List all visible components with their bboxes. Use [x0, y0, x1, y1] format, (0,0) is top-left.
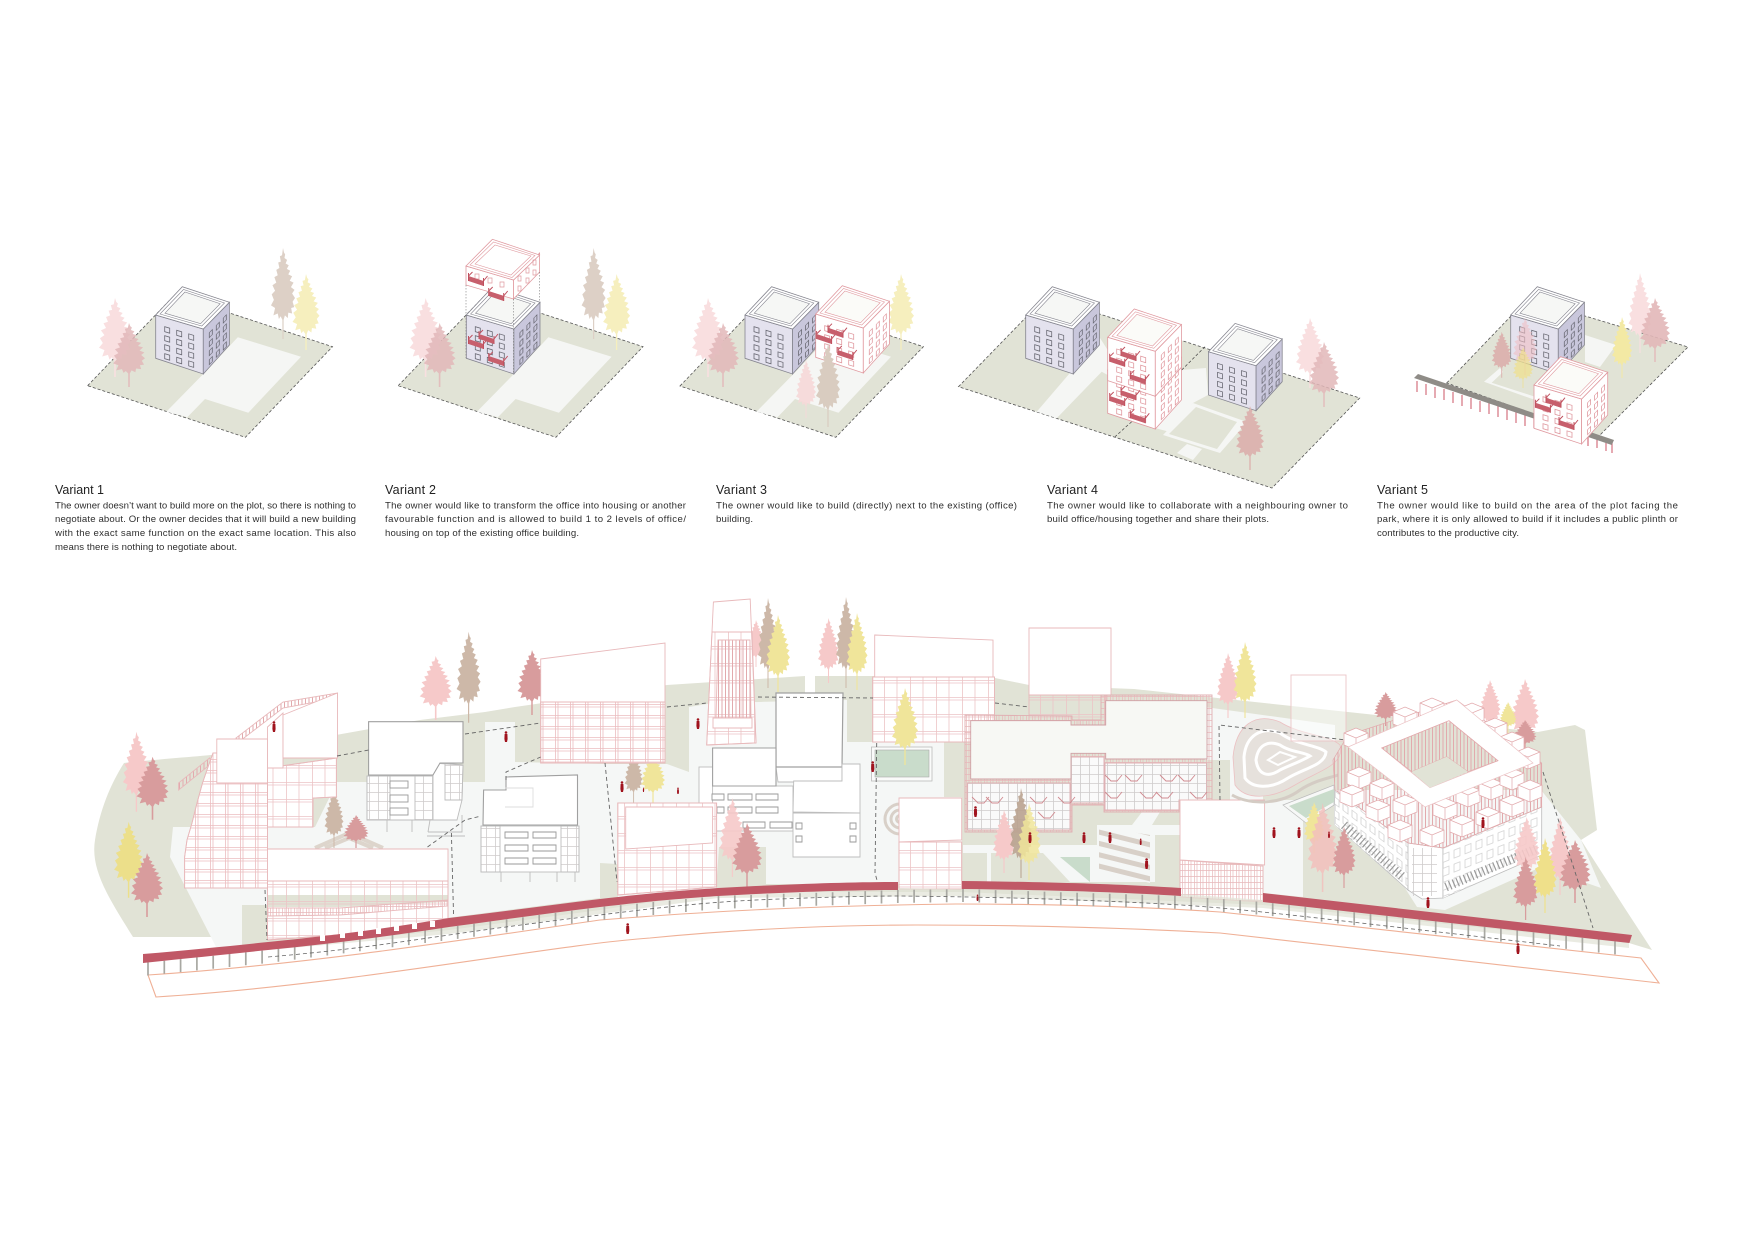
- tree group: [1236, 318, 1339, 470]
- plot: [958, 297, 1360, 488]
- panel: variant 5: [1414, 273, 1688, 453]
- caption variant 3: [716, 483, 1017, 525]
- stepped housing layer: [1333, 700, 1542, 848]
- building: pink block small: [899, 798, 962, 889]
- trees around perimeter block: [1304, 802, 1590, 920]
- walkway posts: [148, 889, 1615, 976]
- building: grey block 2: [481, 775, 579, 882]
- balconies: [1535, 394, 1578, 430]
- back trees: [114, 597, 1539, 917]
- pale paved ground right: [963, 707, 1601, 910]
- building: pink slab middle: [873, 635, 994, 742]
- existing building: [1026, 287, 1099, 374]
- trees in courtyard: [324, 750, 665, 848]
- arcade row: [1344, 825, 1538, 887]
- existing building: [745, 287, 819, 374]
- building: grey block: [367, 722, 465, 836]
- caption variant 2: The owner would like to transform the office into housing or another: [385, 500, 687, 512]
- caption variant 4: build office/housing together and share their plots.: [1047, 514, 1269, 525]
- lower facade corner: [1408, 843, 1443, 899]
- panel: variant 2: [398, 239, 643, 437]
- pale paved ground: [170, 700, 962, 947]
- panel: variant 3: [680, 274, 923, 437]
- caption variant 3: The owner would like to build (directly) next to the existing (office): [716, 500, 1017, 512]
- caption variant 1: with the exact same function on the exact same location. This also: [54, 528, 356, 539]
- inner court walls: [1382, 721, 1498, 772]
- tree group: [99, 248, 320, 387]
- plot: [398, 295, 643, 437]
- tree behind building: [1492, 332, 1512, 378]
- caption variant 5: The owner would like to build on the area of the plot facing the: [1377, 500, 1678, 512]
- caption variant 1: negotiate about. Or the owner decides that it will build a new building: [55, 514, 356, 525]
- caption variant 5: contributes to the productive city.: [1377, 528, 1519, 539]
- courtyard: [756, 337, 891, 417]
- plot: [680, 295, 923, 437]
- building: tower: [707, 599, 756, 745]
- divider: [1115, 347, 1205, 437]
- caption variant 4: [1047, 483, 1348, 525]
- courtyard: [477, 337, 612, 417]
- caption variant 2: [385, 483, 687, 539]
- dashed route: [265, 697, 1593, 940]
- building: pink block east: [1180, 800, 1265, 902]
- walkway dashed line: [268, 896, 1560, 957]
- building: long bar: [268, 849, 448, 940]
- caption variant 4: Variant 4: [1047, 483, 1098, 497]
- walkway red deck: [143, 881, 1632, 963]
- building: pink block south: [618, 803, 717, 895]
- translucent trees: [1513, 318, 1537, 388]
- corner glazing: [1412, 848, 1437, 896]
- plaza elements: [1060, 827, 1150, 883]
- building: grey cluster: [699, 693, 860, 857]
- tree group back: [692, 274, 914, 387]
- caption variant 1: [54, 483, 356, 553]
- caption variant 1: The owner doesn’t want to build more on the plot, so there is nothing to: [55, 500, 356, 512]
- caption variant 3: Variant 3: [716, 483, 767, 497]
- lower facade right: [1443, 807, 1542, 898]
- shared tall building: [1108, 309, 1181, 429]
- panel: variant 4: [958, 287, 1360, 488]
- pool: [872, 747, 932, 781]
- caption variant 2: favourable function and is allowed to build 1 to 2 levels of office/: [385, 514, 686, 525]
- plaza trees: [993, 788, 1040, 880]
- caption variant 2: Variant 2: [385, 483, 436, 497]
- building: top pink frame: [1029, 628, 1111, 725]
- tree group front: [796, 343, 840, 427]
- caption variant 1: Variant 1: [55, 483, 104, 497]
- caption variant 3: building.: [716, 514, 753, 525]
- housing cubes: [1340, 698, 1542, 847]
- existing building: [1511, 287, 1584, 374]
- spiral paving: [885, 804, 915, 834]
- new building: [1534, 357, 1608, 444]
- panel: variant 1: [88, 248, 332, 437]
- caption variant 4: The owner would like to collaborate with a neighbouring owner to: [1047, 500, 1348, 512]
- caption variant 5: Variant 5: [1377, 483, 1428, 497]
- second existing building: [1208, 323, 1282, 411]
- sculpted landscape: [1232, 675, 1346, 802]
- building: terraced block: [179, 693, 338, 888]
- caption variant 5: park, where it is only allowed to build if it includes a public plinth or: [1377, 514, 1679, 525]
- yellow tree: [892, 688, 918, 765]
- panel: masterplan axonometric: [94, 597, 1659, 997]
- plot: [88, 295, 332, 437]
- courtyard paths: [1037, 338, 1247, 460]
- chevron paving: [315, 833, 383, 848]
- pool east: [1283, 785, 1334, 823]
- lower facade left: [1335, 790, 1408, 890]
- sage ground: [94, 676, 1652, 950]
- inner court floor: [1412, 757, 1468, 788]
- caption variant 1: means there is nothing to negotiate about.: [55, 542, 237, 553]
- added storey: [466, 239, 540, 374]
- people: [272, 718, 1520, 954]
- plot: [1447, 299, 1688, 437]
- tree group: [410, 248, 630, 387]
- balconies: [468, 272, 508, 366]
- walkway ground line: [148, 904, 1659, 997]
- existing building: [466, 287, 540, 374]
- roof ring: [1348, 700, 1533, 807]
- building: large courtyard block: [965, 695, 1212, 832]
- new building: [816, 286, 889, 373]
- building: courtyard perimeter block: [1333, 698, 1542, 899]
- tree group right: [1612, 273, 1670, 378]
- balconies: [817, 324, 857, 360]
- trees by south block: [719, 798, 762, 887]
- caption variant 2: housing on top of the existing office building.: [385, 528, 579, 539]
- text: variant captions: [54, 483, 1679, 553]
- white openings on deck: [320, 921, 435, 941]
- existing building: [156, 287, 229, 374]
- building: pink slab north: [541, 643, 665, 763]
- elevated walkway: [1414, 374, 1614, 453]
- balconies: [1110, 347, 1149, 423]
- gap in ground: [805, 672, 815, 694]
- caption variant 5: [1377, 483, 1679, 539]
- walkway canopy shadow: [268, 888, 1629, 950]
- courtyard: [1484, 335, 1616, 399]
- courtyard: [166, 337, 301, 417]
